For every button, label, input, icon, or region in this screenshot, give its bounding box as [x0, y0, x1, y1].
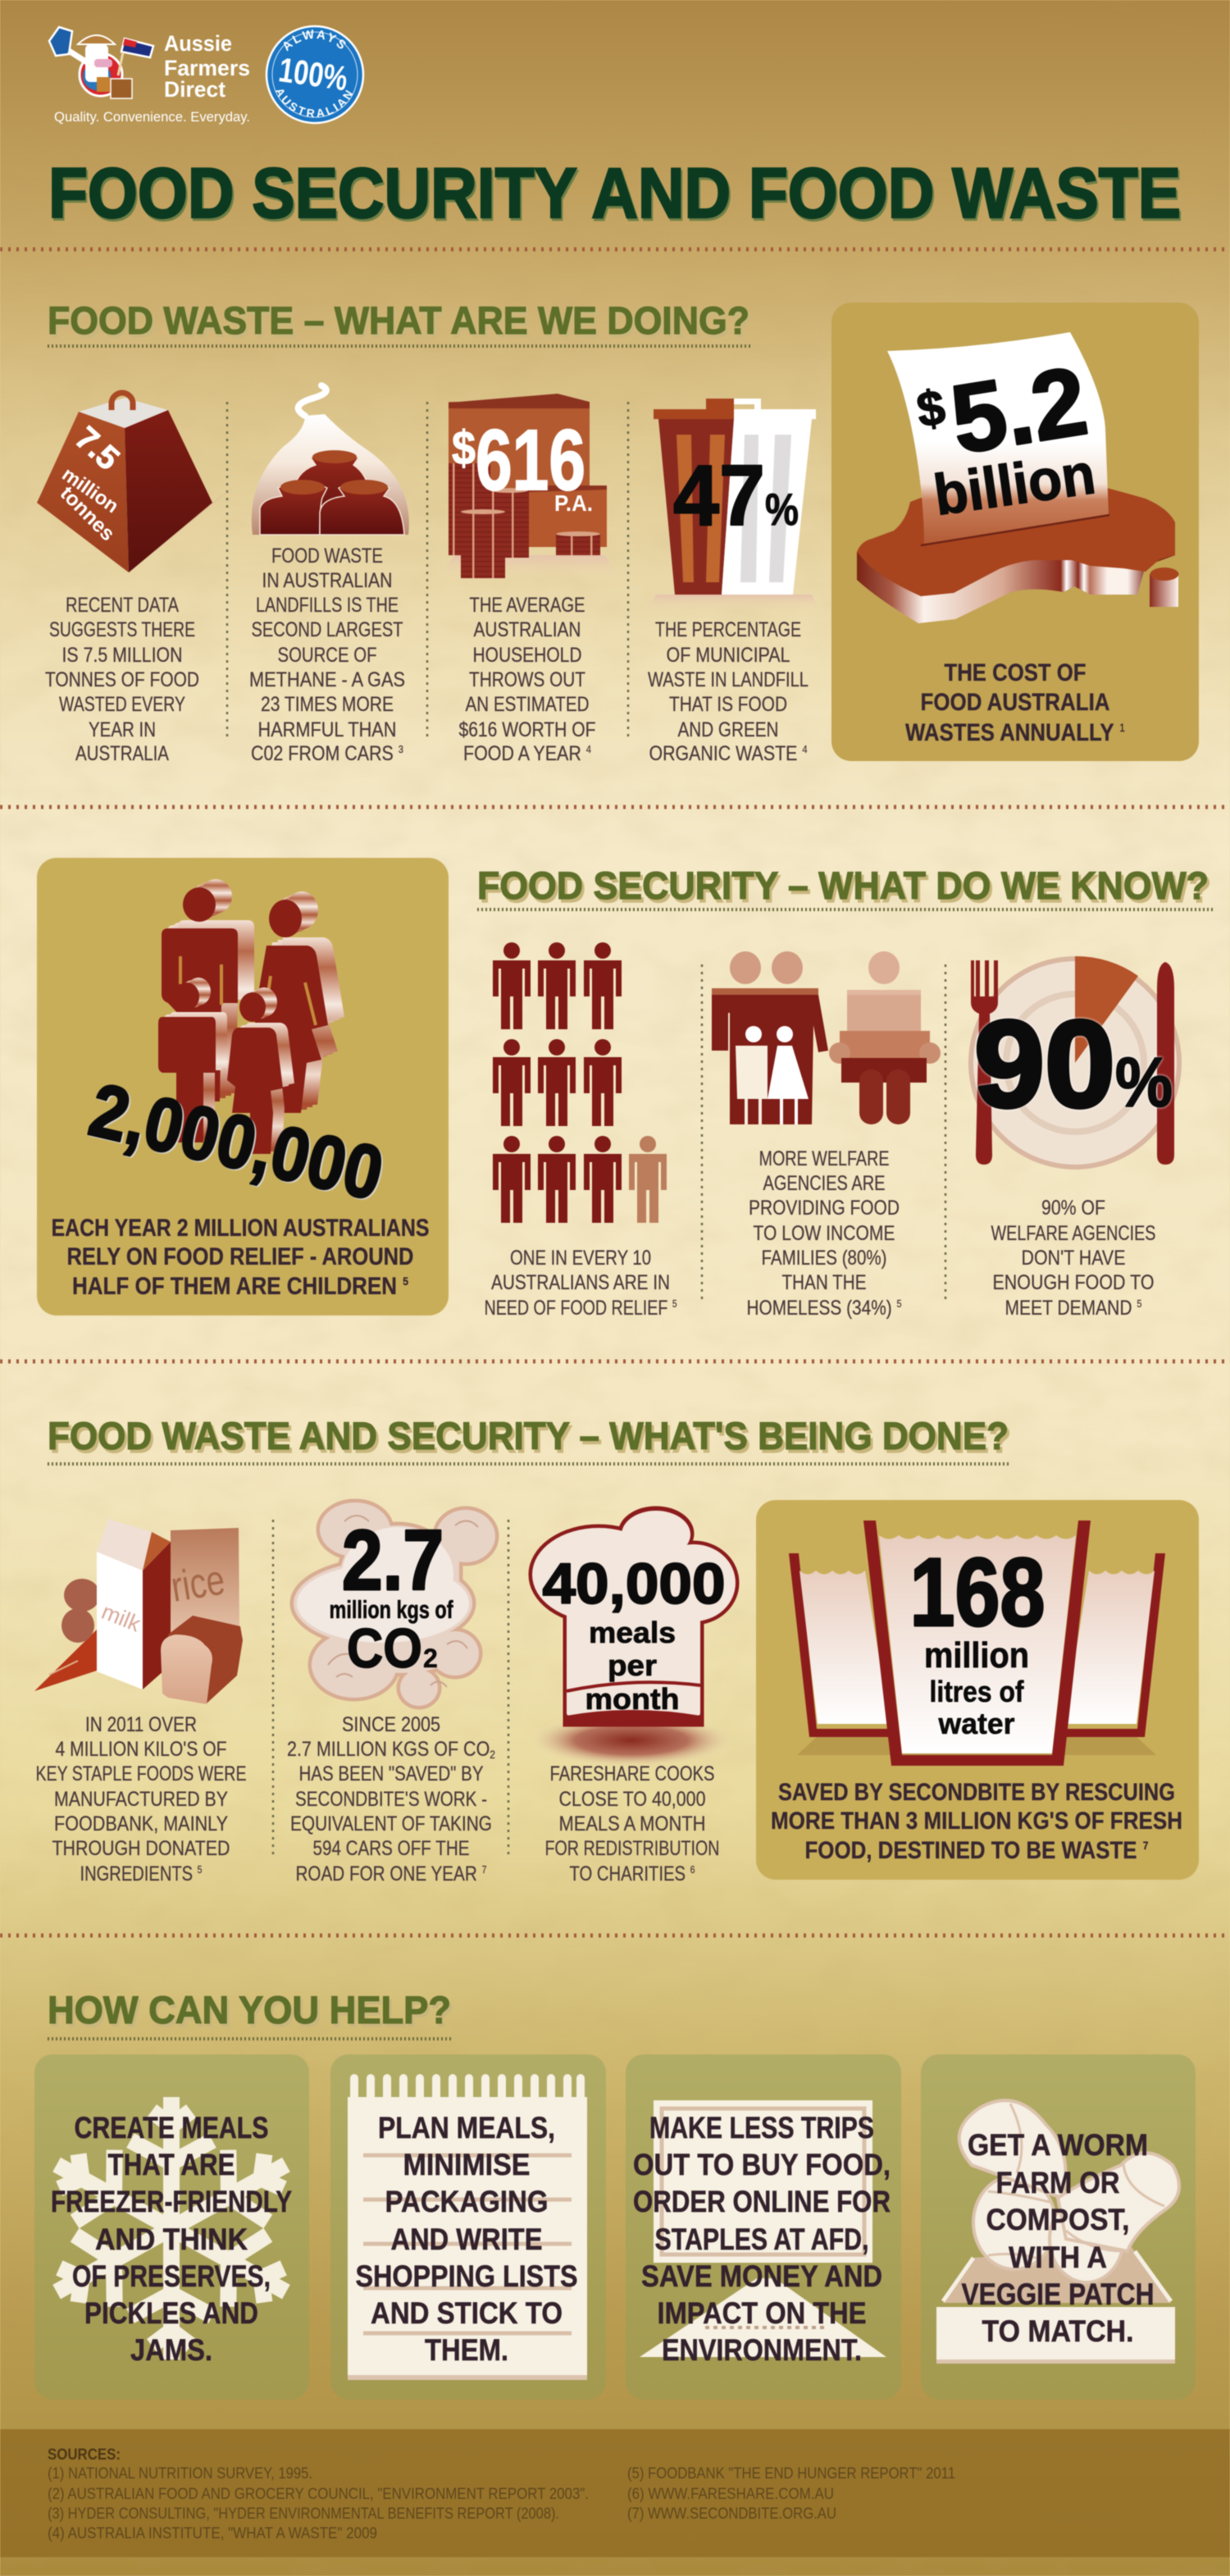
icon: $616 money stacks: $	[452, 422, 476, 475]
text: plan meals: AND WRITE	[390, 2223, 543, 2256]
text: 90% of welfare agencies: DON'T HAVE	[1022, 1247, 1125, 1270]
text: municipal waste: THAT IS FOOD	[669, 693, 787, 716]
text: 90% of welfare agencies: ENOUGH FOOD TO	[992, 1271, 1155, 1294]
text: each year: HALF OF THEM ARE CHILDREN	[72, 1273, 447, 1300]
icon: rubbish bags and methane	[252, 385, 409, 535]
logo: Aussie Farmers Direct: Farmers	[164, 56, 250, 80]
text: foodbank: MANUFACTURED BY	[54, 1788, 228, 1811]
icon: vegetable crate	[936, 2100, 1179, 2364]
text: foodbank: KEY STAPLE FOODS WERE	[36, 1762, 246, 1785]
text: welfare agencies: FAMILIES (80%)	[761, 1247, 887, 1270]
text: create meals: JAMS.	[130, 2333, 212, 2367]
text: secondbite CO2: HAS BEEN "SAVED" BY	[298, 1762, 484, 1785]
text: 90% of welfare agencies: WELFARE AGENCIES	[991, 1222, 1156, 1245]
text: each year: 5	[403, 1274, 408, 1288]
text: municipal waste: THE PERCENTAGE	[655, 618, 801, 641]
logo: Aussie Farmers Direct: Quality. Convenience. Everyday.	[54, 109, 250, 125]
icon: chef hat 40,000 meals: per	[608, 1648, 657, 1682]
text: plan meals: SHOPPING LISTS	[356, 2259, 577, 2293]
text: fareshare	[544, 1762, 720, 1885]
text: cost of food: 1	[1119, 721, 1125, 734]
sources band: (3) HYDER CONSULTING, "HYDER ENVIRONMENTAL BENEFITS REPORT (2008).	[48, 2505, 559, 2523]
icon: family figures	[83, 879, 390, 1216]
text: welfare agencies: PROVIDING FOOD	[749, 1197, 900, 1220]
sources band: (6) WWW.FARESHARE.COM.AU	[627, 2486, 834, 2503]
text: plan meals	[356, 2111, 577, 2367]
panel: worm farm	[921, 2054, 1196, 2400]
icon: Australia map with receipt	[857, 332, 1179, 623]
text: recent data: RECENT DATA	[66, 594, 179, 617]
icon: CO2 clouds: 2.7	[342, 1513, 444, 1608]
icon: water glasses	[789, 1521, 1165, 1766]
text: methane: LANDFILLS IS THE	[256, 594, 399, 617]
icon: Australia map with receipt: $	[913, 379, 949, 438]
text: 90% of welfare agencies: 5	[1137, 1297, 1141, 1310]
text: recent data: IS 7.5 MILLION	[62, 644, 182, 667]
icon: weight 7.5 million tonnes: 7.5	[68, 420, 126, 477]
icon: chef hat 40,000 meals: meals	[589, 1616, 676, 1649]
panel: shopping list	[330, 2054, 606, 2400]
icon: weight 7.5 million tonnes: tonnes	[56, 481, 120, 545]
text: foodbank: 4 MILLION KILO'S OF	[56, 1738, 226, 1761]
text: fareshare: TO CHARITIES	[569, 1862, 713, 1885]
text: create meals: AND THINK	[95, 2223, 248, 2256]
icon: milk, rice, bread, carrots	[34, 1519, 243, 1704]
sources band	[0, 2429, 1230, 2557]
text: secondbite CO2	[287, 1713, 495, 1885]
text: fareshare: 6	[690, 1863, 695, 1876]
text: secondbite CO2: SINCE 2005	[342, 1713, 440, 1736]
badge: always 100% Australian	[265, 25, 365, 125]
text: methane: SOURCE OF	[277, 644, 377, 667]
text: methane: FOOD WASTE	[271, 545, 383, 568]
text: average household: AUSTRALIAN	[474, 618, 581, 641]
text: cost of food	[905, 659, 1125, 746]
text: worm farm: TO MATCH.	[982, 2314, 1133, 2348]
text: 90% of welfare agencies	[991, 1197, 1156, 1320]
text: each year	[51, 1215, 430, 1300]
icon: snowflake	[37, 2097, 306, 2359]
text: one in every 10	[484, 1247, 677, 1320]
text: one in every 10: NEED OF FOOD RELIEF	[484, 1297, 718, 1320]
icon: $616 money stacks	[435, 394, 623, 580]
sources band: (1) NATIONAL NUTRITION SURVEY, 1995.	[48, 2465, 312, 2483]
text: foodbank: FOODBANK, MAINLY	[54, 1812, 228, 1835]
text: create meals: THAT ARE	[108, 2148, 235, 2182]
text: methane	[249, 545, 405, 765]
text: recent data: YEAR IN	[89, 718, 156, 741]
text: methane: IN AUSTRALIAN	[262, 569, 392, 592]
text: saved by secondbite: 7	[1143, 1839, 1149, 1852]
icon: plate with fork and knife, 90%: 90	[974, 995, 1115, 1133]
icon: CO2 clouds: CO	[347, 1617, 422, 1680]
text: create meals: FREEZER-FRIENDLY	[51, 2185, 292, 2218]
icon: water glasses: water	[938, 1707, 1015, 1740]
text: welfare agencies	[746, 1147, 902, 1320]
text: recent data: SUGGESTS THERE	[49, 618, 195, 641]
icon: water glasses: million	[924, 1635, 1029, 1676]
text: average household: FOOD A YEAR	[463, 742, 601, 765]
text: worm farm: WITH A	[1009, 2241, 1107, 2274]
text: create meals	[51, 2111, 292, 2367]
text: municipal waste: AND GREEN	[677, 718, 779, 741]
text: foodbank: IN 2011 OVER	[85, 1713, 197, 1736]
text: plan meals: PLAN MEALS,	[378, 2111, 555, 2145]
text: average household: AN ESTIMATED	[466, 693, 589, 716]
text: average household: $616 WORTH OF	[459, 718, 595, 741]
text: average household: THE AVERAGE	[469, 594, 585, 617]
sources band: (7) WWW.SECONDBITE.ORG.AU	[627, 2505, 836, 2523]
text: fareshare: MEALS A MONTH	[559, 1812, 705, 1835]
text: methane: 23 TIMES MORE	[261, 693, 394, 716]
badge: always 100% Australian: 100%	[276, 50, 350, 98]
icon: computer	[640, 2100, 886, 2357]
text: make less trips: ENVIRONMENT.	[662, 2333, 862, 2367]
text: 90% of welfare agencies: MEET DEMAND	[1005, 1297, 1156, 1320]
icon: chef hat 40,000 meals: month	[585, 1682, 679, 1716]
icon: Australia map with receipt: 5.2	[944, 347, 1094, 475]
text: methane: C02 FROM CARS	[251, 742, 417, 765]
sources band: SOURCES:	[48, 2446, 121, 2464]
text: make less trips: SAVE MONEY AND	[641, 2259, 882, 2293]
text: municipal waste: OF MUNICIPAL	[666, 644, 790, 667]
text: fareshare: FARESHARE COOKS	[549, 1762, 715, 1785]
text: welfare agencies: MORE WELFARE	[759, 1147, 889, 1170]
icon: notepad	[348, 2078, 587, 2380]
text: municipal waste: ORGANIC WASTE	[649, 742, 822, 765]
heading: what's being done: FOOD WASTE AND SECURITY – WHAT'S BEING DONE?	[48, 1414, 1009, 1457]
icon: CO2 clouds: million kgs of	[330, 1595, 453, 1624]
icon: ten people	[493, 942, 667, 1223]
text: create meals: CREATE MEALS	[74, 2111, 269, 2145]
text: make less trips: IMPACT ON THE	[658, 2296, 866, 2330]
text: plan meals: THEM.	[425, 2333, 508, 2367]
logo: Aussie Farmers Direct	[49, 27, 250, 125]
text: cost of food: FOOD AUSTRALIA	[920, 689, 1110, 716]
text: methane: SECOND LARGEST	[251, 618, 403, 641]
text: secondbite CO2: 7	[482, 1863, 487, 1876]
panel: 2,000,000	[37, 858, 449, 1315]
text: one in every 10: 5	[672, 1297, 677, 1310]
text: one in every 10: ONE IN EVERY 10	[510, 1247, 651, 1270]
icon: weight 7.5 million tonnes	[37, 393, 238, 572]
text: recent data: WASTED EVERY	[59, 693, 185, 716]
text: one in every 10: AUSTRALIANS ARE IN	[491, 1271, 670, 1294]
text: average household: HOUSEHOLD	[472, 644, 582, 667]
icon: milk, rice, bread, carrots: milk	[98, 1599, 144, 1637]
icon: family figures: 2,000,000	[83, 1068, 390, 1216]
icon: $616 money stacks: P.A.	[554, 490, 593, 516]
text: create meals: OF PRESERVES,	[72, 2259, 271, 2293]
text: average household	[459, 594, 595, 765]
text: secondbite CO2: SECONDBITE'S WORK -	[295, 1788, 487, 1811]
text: make less trips: MAKE LESS TRIPS	[649, 2111, 874, 2145]
icon: CO2 clouds: 2	[423, 1644, 438, 1673]
icon: milk, rice, bread, carrots: rice	[168, 1556, 228, 1612]
text: worm farm	[961, 2128, 1155, 2348]
icon: bin 47%: %	[765, 484, 799, 535]
icon: Australia map with receipt: billion	[930, 441, 1099, 527]
panel: online shopping	[626, 2054, 901, 2400]
text: plan meals: MINIMISE	[403, 2148, 530, 2182]
text: make less trips: OUT TO BUY FOOD,	[633, 2148, 891, 2182]
text: saved by secondbite: FOOD, DESTINED TO BE WASTE	[805, 1837, 1190, 1864]
heading: food security: FOOD SECURITY – WHAT DO WE KNOW?	[477, 864, 1209, 907]
text: foodbank: 5	[198, 1863, 202, 1876]
text: worm farm: GET A WORM	[968, 2128, 1148, 2162]
icon: plate with fork and knife, 90%: %	[1115, 1044, 1173, 1122]
icon: bin 47%: 47	[673, 448, 765, 544]
text: each year: EACH YEAR 2 MILLION AUSTRALIANS	[51, 1215, 430, 1242]
text: fareshare: CLOSE TO 40,000	[559, 1788, 705, 1811]
text: make less trips	[633, 2111, 891, 2367]
text: secondbite CO2: EQUIVALENT OF TAKING	[290, 1812, 492, 1835]
text: make less trips: STAPLES AT AFD,	[654, 2223, 869, 2256]
text: welfare agencies: HOMELESS (34%)	[746, 1297, 921, 1320]
text: saved by secondbite	[771, 1779, 1182, 1864]
text: recent data: TONNES OF FOOD	[45, 668, 199, 691]
text: foodbank	[36, 1713, 246, 1885]
text: secondbite CO2: 594 CARS OFF THE	[313, 1837, 469, 1860]
text: recent data: AUSTRALIA	[75, 742, 169, 765]
text: welfare agencies: THAN THE	[782, 1271, 866, 1294]
text: cost of food: WASTES ANNUALLY	[905, 719, 1148, 746]
text: recent data	[45, 594, 199, 765]
panel: $5.2 billion	[831, 303, 1199, 761]
text: municipal waste	[648, 618, 809, 765]
text: methane: HARMFUL THAN	[257, 718, 397, 741]
text: municipal waste: WASTE IN LANDFILL	[648, 668, 809, 691]
icon: water glasses: 168	[910, 1539, 1045, 1647]
text: worm farm: FARM OR	[995, 2166, 1120, 2200]
heading: food waste: FOOD WASTE – WHAT ARE WE DOING?	[48, 299, 749, 342]
badge: always 100% Australian: ALWAYS	[283, 29, 346, 52]
icon: weight 7.5 million tonnes: million	[58, 463, 122, 517]
icon: $616 money stacks: 616	[476, 413, 585, 508]
text: average household: THROWS OUT	[469, 668, 585, 691]
panel: 168 million litres	[756, 1500, 1199, 1880]
icon: CO2 clouds	[294, 1502, 495, 1706]
badge: always 100% Australian: AUSTRALIAN	[276, 89, 353, 118]
logo: Aussie Farmers Direct: Direct	[164, 77, 226, 102]
text: foodbank: INGREDIENTS	[80, 1862, 220, 1885]
icon: chef hat 40,000 meals: 40,000	[543, 1552, 725, 1616]
text: welfare agencies: TO LOW INCOME	[753, 1222, 895, 1245]
text: average household: 4	[586, 743, 591, 755]
icon: water glasses: litres of	[930, 1675, 1024, 1708]
text: plan meals: AND STICK TO	[371, 2296, 563, 2330]
panel: freezer meals	[34, 2054, 309, 2400]
text: cost of food: THE COST OF	[945, 659, 1086, 686]
icon: low income family and homeless person	[712, 951, 941, 1124]
text: 90% of welfare agencies: 90% OF	[1041, 1197, 1105, 1220]
text: secondbite CO2: ROAD FOR ONE YEAR	[295, 1862, 515, 1885]
icon: plate with fork and knife, 90%	[968, 956, 1182, 1169]
text: methane: METHANE - A GAS	[249, 668, 405, 691]
heading: how can you help: HOW CAN YOU HELP?	[48, 1988, 451, 2031]
text: welfare agencies: 5	[896, 1297, 902, 1310]
sources band: (4) AUSTRALIA INSTITUTE, "WHAT A WASTE" 2009	[48, 2525, 377, 2542]
sources band: (5) FOODBANK "THE END HUNGER REPORT" 2011	[627, 2465, 955, 2483]
text: secondbite CO2: 2.7 MILLION KGS OF CO	[287, 1738, 523, 1761]
text: each year: RELY ON FOOD RELIEF - AROUND	[67, 1243, 413, 1270]
text: worm farm: VEGGIE PATCH	[961, 2277, 1155, 2311]
text: foodbank: THROUGH DONATED	[52, 1837, 230, 1860]
text: municipal waste: 4	[802, 743, 807, 755]
logo: Aussie Farmers Direct: Aussie	[164, 31, 232, 56]
icon: bin 47%	[648, 399, 820, 611]
text: create meals: PICKLES AND	[84, 2296, 258, 2330]
text: worm farm: COMPOST,	[986, 2203, 1130, 2236]
text: welfare agencies: AGENCIES ARE	[763, 1172, 886, 1195]
text: secondbite CO2: 2	[490, 1748, 495, 1761]
text: make less trips: ORDER ONLINE FOR	[633, 2185, 891, 2218]
text: methane: 3	[399, 743, 403, 755]
text: fareshare: FOR REDISTRIBUTION	[544, 1837, 720, 1860]
icon: chef hat 40,000 meals	[529, 1509, 736, 1767]
sources band: (2) AUSTRALIAN FOOD AND GROCERY COUNCIL, "ENVIRONMENT REPORT 2003".	[48, 2486, 589, 2503]
text: plan meals: PACKAGING	[385, 2185, 548, 2218]
